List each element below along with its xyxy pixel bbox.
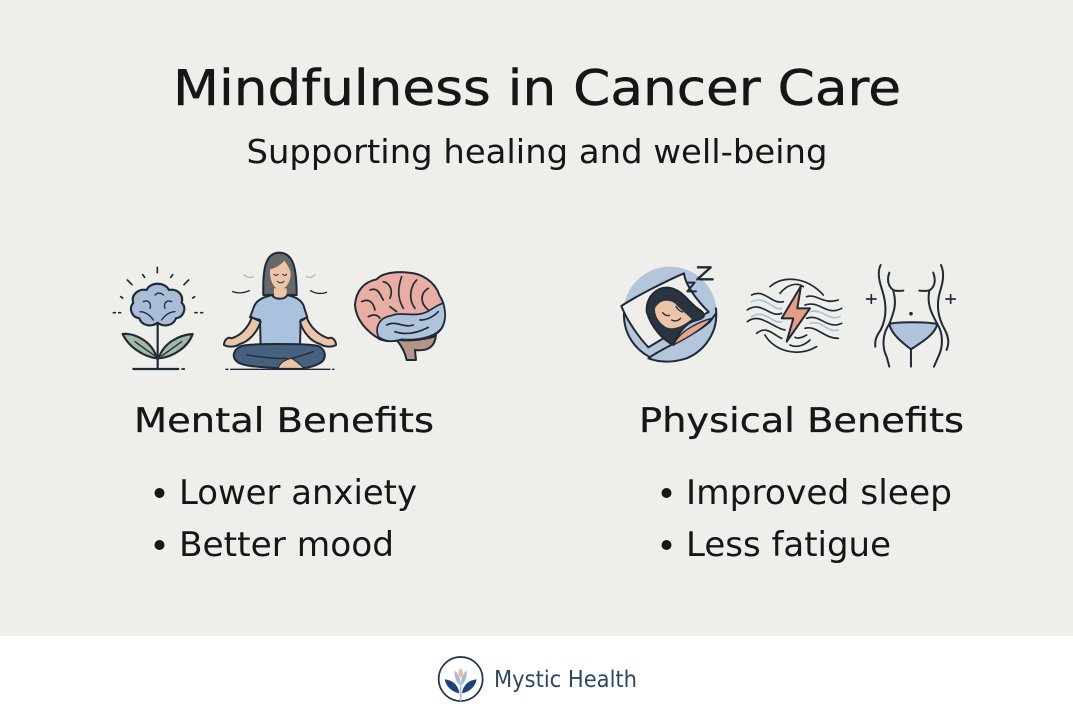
icon: body silhouette: [867, 265, 955, 367]
footer band: [0, 636, 1073, 720]
title: Mindfulness in Cancer Care: [173, 60, 901, 117]
icon: sleeping woman: [621, 267, 717, 362]
heading: mental benefits: Mental Benefits: [134, 401, 434, 441]
icon: energy waves with lightning bolt: [747, 279, 842, 352]
icon: brain flower: [113, 267, 203, 369]
logo: Mystic Health: [439, 657, 637, 701]
subtitle: Supporting healing and well-being: [246, 132, 828, 171]
list: mental benefits: Lower anxiety: [179, 473, 417, 513]
list: physical benefits: Less fatigue: [686, 525, 891, 565]
icon: lotus logo mark: [439, 657, 483, 701]
list: physical benefits: [662, 473, 952, 565]
icon: meditating woman: [224, 253, 336, 369]
brand name: Mystic Health: [494, 667, 637, 693]
icon: brain: [355, 272, 445, 360]
list: physical benefits: Improved sleep: [686, 473, 952, 513]
heading: physical benefits: Physical Benefits: [639, 401, 964, 441]
list: mental benefits: [154, 473, 417, 565]
list: mental benefits: Better mood: [179, 525, 394, 565]
